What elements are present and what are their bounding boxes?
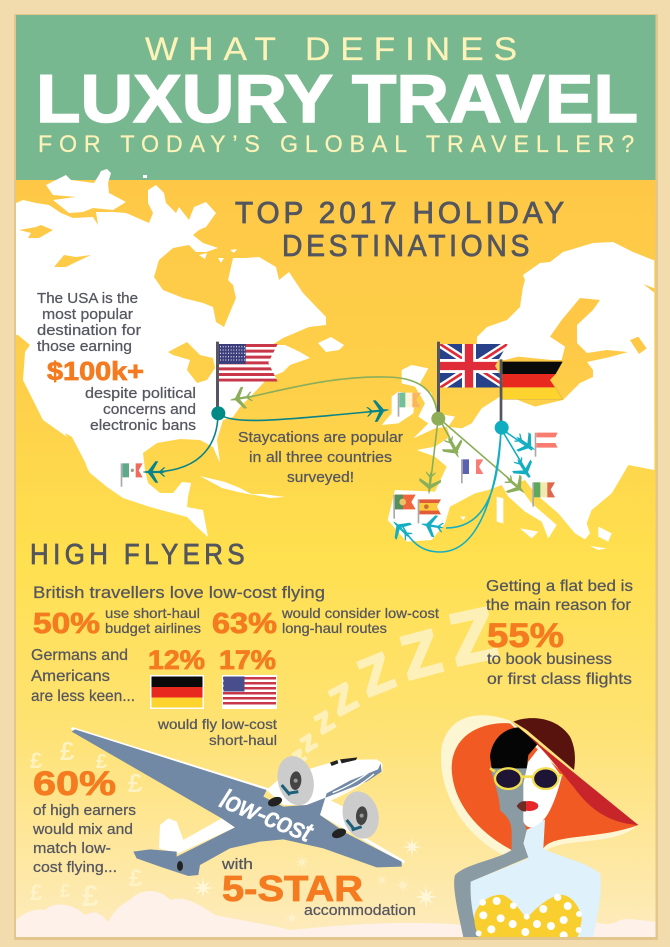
small flag: Mexico <box>121 463 143 487</box>
flag: USA large <box>211 342 278 420</box>
cockpit windows <box>330 757 357 766</box>
text block: 60%: cost flying... <box>33 859 117 876</box>
pound signs: £ <box>30 748 43 773</box>
engine struts <box>282 785 362 830</box>
pound signs: £ <box>60 736 75 766</box>
landing wheels <box>177 795 347 871</box>
plane fuselage <box>159 759 382 853</box>
zzz sleep trail: Z <box>351 642 402 708</box>
flag: UK large <box>431 342 508 426</box>
icon: US flag <box>222 675 277 709</box>
zzz sleep trail: Z <box>310 705 339 739</box>
pound signs: £ <box>96 751 107 773</box>
text block: British travellers: long-haul routes <box>282 620 387 636</box>
title line 1: WHAT DEFINES <box>145 31 527 67</box>
text block: 60%: 60% <box>33 765 116 803</box>
plane label: low-cost <box>216 783 318 848</box>
small flag: France <box>461 459 483 483</box>
text block: Germans and Americans: Germans and <box>31 647 128 664</box>
zzz sleep trail: Z <box>442 591 504 682</box>
text block: Germans and Americans: would fly low-cost <box>157 716 277 732</box>
text block: Germans and Americans: are less keen... <box>31 688 135 705</box>
zzz sleep trail: Z <box>291 748 309 767</box>
flag: Germany large <box>495 359 563 435</box>
small flag: Italy <box>532 482 555 507</box>
text block: Germans and Americans: short-haul <box>209 732 277 748</box>
text block: British travellers: 50% <box>33 608 100 640</box>
small flag: Ireland <box>398 393 421 417</box>
clouds <box>16 891 656 937</box>
propeller left <box>272 752 319 809</box>
text block: USA: concerns and <box>103 401 196 418</box>
title line 3: FOR TODAY’S GLOBAL TRAVELLER? <box>38 131 641 158</box>
text block: 60% <box>32 765 136 876</box>
text block: flat bed: the main reason for <box>486 597 632 614</box>
text block: 5-star <box>221 856 416 919</box>
pound signs: £ <box>30 880 43 905</box>
pound signs: £ <box>60 881 70 901</box>
text block: British travellers: 63% <box>212 608 277 640</box>
text block: British travellers: use short-haul <box>105 605 200 621</box>
heading: high flyers: HIGH FLYERS <box>30 539 249 571</box>
text block: Germans and Americans: 17% <box>219 645 276 675</box>
text block: USA: most popular <box>42 306 133 323</box>
text block: flat bed: 55% <box>487 617 564 655</box>
icon: German flag <box>150 675 204 709</box>
text block: USA: The USA is the <box>37 290 138 307</box>
banner: title <box>16 15 656 180</box>
text block: USA: destination for <box>37 322 141 339</box>
text block: British travellers: British travellers love low-cost flying <box>33 583 325 602</box>
arctic islands <box>46 169 147 213</box>
text block: staycations <box>238 429 403 486</box>
zzz sleep trail: Z <box>324 676 364 724</box>
title line 2: LUXURY TRAVEL <box>36 61 638 137</box>
Great Lakes and northern lakes <box>19 225 215 475</box>
zzz sleep trail <box>292 606 500 762</box>
pound signs: £ <box>129 865 143 892</box>
text block: British travellers <box>34 586 439 636</box>
pound signs <box>30 736 143 913</box>
flight routes <box>155 377 532 552</box>
propeller right <box>337 787 384 843</box>
text block: staycations: surveyed! <box>287 469 354 486</box>
Newfoundland and Caribbean <box>199 249 344 498</box>
text block: Germans and Americans: 12% <box>148 645 205 675</box>
small flag: Spain <box>418 499 441 523</box>
North America landmass <box>16 185 326 537</box>
text block: 5-star: with <box>221 856 253 873</box>
small flag: Austria <box>535 433 558 457</box>
text block: 60%: would mix and <box>32 821 133 838</box>
text block: staycations: Staycations are popular <box>238 429 403 446</box>
heading: top destinations <box>235 201 564 257</box>
text block: Germans and Americans <box>31 645 277 748</box>
pound signs: £ <box>128 768 143 798</box>
text block: flat bed: Getting a flat bed is <box>486 578 633 595</box>
plane white highlight on wing <box>73 729 403 862</box>
plane wings and belly <box>72 729 402 876</box>
text block: flat bed: to book business <box>487 651 612 668</box>
text block: USA <box>37 290 196 434</box>
text block: USA: $100k+ <box>47 356 144 386</box>
text block: 5-star: 5-STAR <box>222 868 363 909</box>
text block: 60%: of high earners <box>33 802 136 819</box>
text block: Germans and Americans: Americans <box>31 668 110 685</box>
small flag: Portugal <box>393 495 416 519</box>
zzz sleep trail: Z <box>298 731 320 756</box>
text block: 5-star: accommodation <box>304 902 416 919</box>
text block: flat bed: or first class flights <box>487 671 632 688</box>
heading: top destinations: DESTINATIONS <box>282 228 533 263</box>
text block: flat bed <box>486 578 633 688</box>
stars <box>192 837 438 925</box>
text block: British travellers: would consider low-cost <box>281 605 439 621</box>
text block: USA: those earning <box>37 338 132 355</box>
route planes <box>143 385 541 545</box>
illustration: woman in sun hat <box>441 715 638 939</box>
nose stripes <box>330 770 374 800</box>
text block: staycations: in all three countries <box>249 449 392 466</box>
heading: top destinations: TOP 2017 HOLIDAY <box>235 195 568 230</box>
text block: British travellers: budget airlines <box>105 620 201 636</box>
pound signs: £ <box>82 880 99 913</box>
illustration: plane <box>72 729 403 876</box>
zzz sleep trail: Z <box>394 617 448 694</box>
panel: world map <box>16 185 654 550</box>
Europe landmass <box>382 242 654 550</box>
text block: USA: electronic bans <box>90 417 196 434</box>
text block: 60%: match low- <box>33 840 111 857</box>
text block: USA: despite political <box>85 385 196 402</box>
